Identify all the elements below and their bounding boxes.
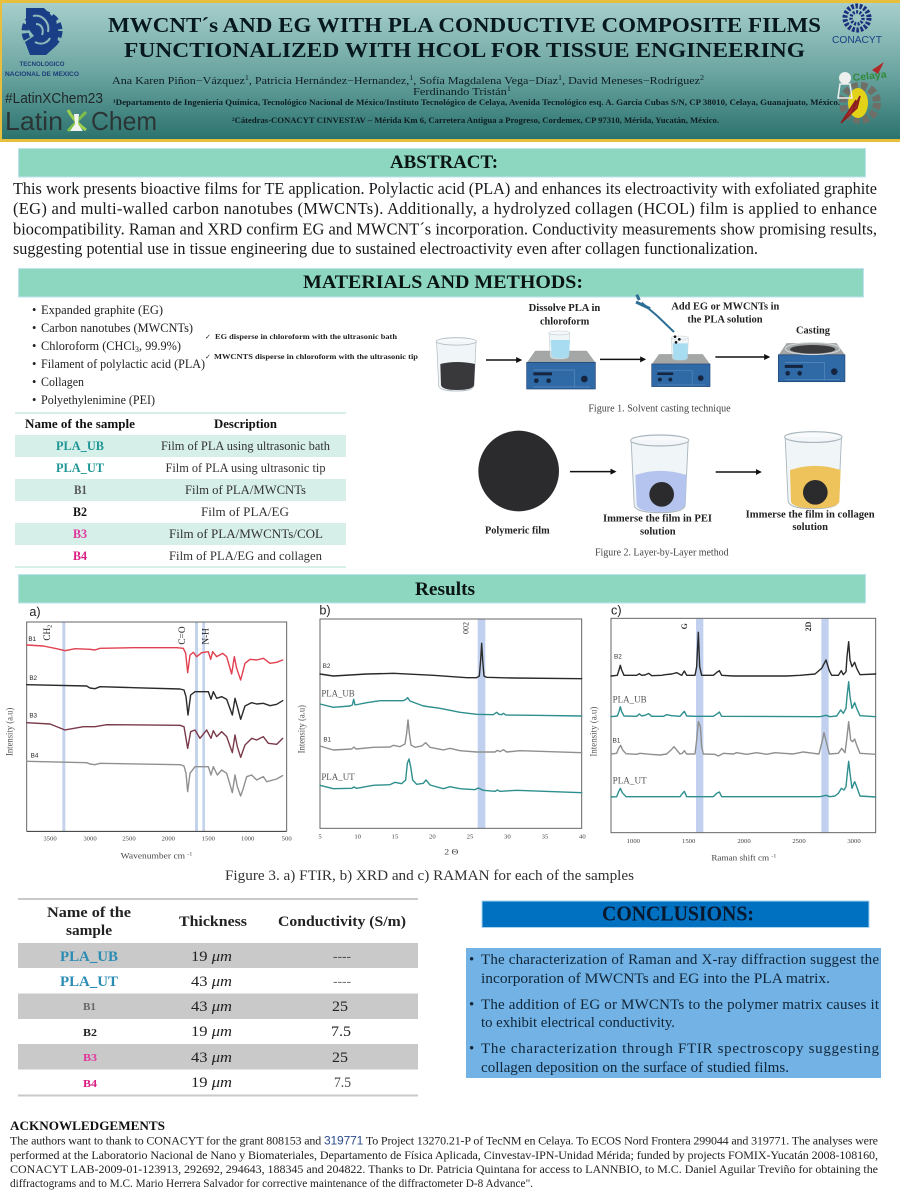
conclusions panel: • (469, 997, 474, 1013)
icon: film in collagen beaker (785, 432, 842, 509)
abstract text: biocompatibility. Raman and XRD confirm EG and MWCNT´s incorporation. Conductivity measurements show promising results, (13, 220, 877, 238)
chart c: Raman: 2500 (792, 838, 806, 845)
conclusions panel: incorporation of MWCNTs and EG into the PLA matrix. (481, 971, 830, 987)
conductivity table: 43 μm (191, 974, 232, 990)
arrow (715, 355, 769, 359)
icon: casting on hot plate (778, 343, 845, 382)
authors: , Sofía Magdalena Vega−Díaz (413, 76, 558, 87)
icon: pipette adding filler on hot plate (636, 295, 710, 387)
abstract text: (EG) and multi-walled carbon nanotubes (MWCNTs). Additionally, a hydrolyzed collagen (HCOL) film is applied to enhance (13, 199, 877, 218)
step labels: Casting (796, 325, 830, 336)
chart a: FTIR: B4 (31, 752, 39, 759)
step labels: chloroform (540, 316, 590, 327)
materials list: Expanded graphite (EG) (41, 303, 163, 317)
chart c: Raman: 1000 (627, 838, 641, 845)
chart b: XRD: 20 (429, 833, 436, 840)
chart b: XRD: Intensity (a.u) (588, 707, 598, 757)
acknowledgements: CONACYT LAB-2009-01-123913, 292692, 294643, 188345 and 204822. Thanks to Dr. Patricia Quintana for access to LANNBIO, to M.C. Daniel Aguilar Treviño for obtaining the (10, 1162, 878, 1176)
samples table (15, 412, 346, 568)
heading: abstract: ABSTRACT: (390, 152, 498, 173)
chart b: XRD: PLA_UB (321, 689, 355, 699)
chart b: XRD: 40 (579, 833, 586, 840)
logo: Tecnologico Nacional de Mexico (5, 8, 79, 78)
conductivity table: B3 (83, 1053, 97, 1064)
samples table: Film of PLA/MWCNTs (185, 483, 306, 497)
logo: CONACYT (832, 6, 882, 46)
abstract text: suggesting potential use in tissue engineering due to sustained electroactivity even after collagen functionalization. (13, 239, 758, 258)
step labels (485, 509, 875, 537)
affiliations: ¹Departamento de Ingeniería Química, Tecnológico Nacional de México/Instituto Tecnológico de Celaya, Avenida Tecnológico esq. A. García Cubas S/N, CP 38010, Celaya, Guanajuato, México. (113, 98, 840, 107)
samples table: B3 (73, 527, 87, 541)
caption: figure 2: Figure 2. Layer-by-Layer method (595, 548, 729, 559)
materials list: Filament of polylactic acid (PLA) (41, 357, 205, 371)
step labels: Immerse the film in PEI (603, 513, 712, 524)
materials list: • (32, 357, 36, 371)
heading: conclusions: CONCLUSIONS: (602, 902, 754, 926)
chart c: Raman: Raman shift cm (711, 854, 764, 863)
conductivity table: 43 μm (191, 999, 232, 1015)
heading: materials and methods (18, 268, 864, 297)
chart b: XRD: 30 (504, 833, 511, 840)
conductivity table: PLA_UB (60, 949, 118, 965)
dispersion notes: EG disperse in chloroform with the ultrasonic bath (215, 332, 398, 341)
step labels: Polymeric film (485, 525, 550, 536)
arrow (716, 470, 760, 474)
materials list: , 99.9%) (139, 339, 181, 353)
chart c: Raman: c) (611, 604, 622, 618)
icon: beaker with dispersion (436, 338, 476, 391)
chart a: FTIR: 500 (282, 836, 292, 843)
dispersion notes: ✓ (205, 333, 211, 341)
conductivity table (18, 898, 418, 1096)
heading: results: Results (415, 579, 475, 600)
samples table: PLA_UT (56, 461, 105, 475)
logo: Tecnologico Nacional de Mexico: NACIONAL DE MEXICO (5, 71, 79, 78)
step labels: solution (640, 526, 676, 537)
logo: Celaya: Celaya (852, 69, 888, 84)
acknowledgements: performed at the Laboratorio Nacional de Nano y Biomateriales, Departamento de Física Aplicada, Cinvestav-IPN-Unidad Mérida; funded by projects FOMIX-Yucatán 2008-108160, (10, 1148, 878, 1162)
chart b: XRD: 5 (318, 833, 322, 840)
figure 1 solvent casting diagram (436, 295, 845, 391)
chart c: Raman: B2 (614, 654, 622, 661)
samples table: Description (214, 417, 277, 431)
dispersion notes: ✓ (205, 353, 211, 361)
chart a: FTIR: Wavenumber cm (121, 851, 179, 861)
chart b: XRD: 35 (542, 833, 549, 840)
authors: 1 (409, 74, 414, 82)
samples table: PLA_UB (56, 439, 104, 453)
dispersion notes: MWCNTS disperse in chloroform with the ultrasonic tip (214, 352, 418, 361)
chart a: FTIR: 1000 (241, 836, 255, 843)
materials list: Chloroform (CHCl (41, 339, 136, 353)
conclusions panel: • (469, 1041, 474, 1057)
heading: abstract (18, 148, 866, 177)
arrow (600, 357, 645, 362)
arrow (486, 358, 521, 362)
abstract text (13, 179, 877, 258)
chart b: XRD (296, 604, 598, 856)
caption: figure 1: Figure 1. Solvent casting technique (588, 403, 731, 414)
step labels: the PLA solution (687, 314, 763, 325)
dispersion notes (205, 332, 418, 361)
conductivity table: 43 μm (191, 1050, 232, 1066)
samples table: Name of the sample (25, 417, 135, 431)
chart c: Raman: 2D (804, 621, 813, 631)
chart a: FTIR: 2000 (162, 836, 176, 843)
conductivity table: ---- (333, 974, 351, 990)
step labels: Add EG or MWCNTs in (671, 301, 780, 312)
poster title: FUNCTIONALIZED WITH HCOL FOR TISSUE ENGINEERING (124, 38, 805, 62)
materials list: • (32, 393, 36, 407)
heading: conclusions (482, 901, 869, 928)
logo: LatinXChem: Chem (91, 106, 157, 136)
conclusions panel (466, 948, 881, 1078)
conductivity table: Thickness (179, 914, 247, 930)
conclusions panel: The characterization through FTIR spectroscopy suggesting (481, 1041, 880, 1057)
chart a: FTIR: CH (43, 628, 53, 641)
conductivity table: 25 (332, 1050, 348, 1066)
chart c: Raman (611, 604, 876, 863)
figures: solvent casting and layer-by-layer (436, 295, 875, 559)
samples table: B2 (73, 505, 87, 519)
logo: Celaya (838, 62, 888, 123)
samples table: Film of PLA/MWCNTs/COL (169, 527, 323, 541)
conductivity table: Name of the (47, 905, 131, 921)
samples table: Film of PLA/EG (201, 505, 289, 519)
conductivity table: sample (66, 923, 112, 939)
chart a: FTIR: 2500 (122, 836, 136, 843)
conductivity table: B2 (83, 1028, 97, 1039)
chart b: XRD: 15 (392, 833, 399, 840)
chart b: XRD: 25 (467, 833, 474, 840)
samples table: B1 (74, 483, 87, 497)
chart a: FTIR: B1 (28, 636, 37, 643)
materials list: 3 (135, 345, 139, 354)
chart c: Raman: 2000 (737, 838, 751, 845)
arrow (570, 469, 615, 474)
icon: film in PEI beaker (631, 435, 689, 513)
conclusions panel: • (469, 952, 474, 968)
conductivity table: ---- (333, 949, 351, 965)
authors: , Patricia Hernández−Hernandez, (249, 76, 409, 87)
materials list: Carbon nanotubes (MWCNTs) (41, 321, 193, 335)
conclusions panel: The addition of EG or MWCNTs to the polymer matrix causes it (481, 997, 880, 1013)
chart c: Raman: PLA_UT (613, 775, 647, 785)
header band (0, 0, 900, 142)
authors: 2 (700, 74, 705, 82)
step labels: solution (792, 522, 828, 533)
authors: Ferdinando Tristán (413, 87, 493, 98)
materials list: Polyethylenimine (PEI) (41, 393, 155, 407)
heading: materials and methods: MATERIALS AND METHODS: (303, 272, 583, 293)
authors (112, 74, 705, 98)
chart c: Raman: -1 (771, 853, 777, 859)
abstract text: This work presents bioactive films for TE application. Polylactic acid (PLA) and enhances its electroactivity with exfoliated graphite (13, 179, 877, 198)
affiliations (113, 98, 840, 125)
chart b: XRD: 10 (354, 833, 362, 840)
chart a: FTIR: N-H (202, 628, 212, 645)
materials list: • (32, 339, 36, 353)
chart c: Raman: 3000 (847, 838, 861, 845)
chart a: FTIR (5, 605, 292, 861)
icon: polymeric film (478, 431, 559, 511)
materials list: • (32, 303, 36, 317)
conclusions panel: collagen deposition on the surface of studied films. (481, 1060, 789, 1076)
logo: CONACYT: CONACYT (832, 35, 882, 46)
conductivity table: 19 μm (191, 1075, 232, 1091)
chart a: FTIR: -1 (187, 851, 193, 857)
acknowledgements: ACKNOWLEDGEMENTS (10, 1119, 165, 1133)
chart a: FTIR: Intensity (a.u) (5, 708, 15, 756)
chart b: XRD: B1 (323, 736, 332, 743)
chart a: FTIR: a) (29, 605, 41, 619)
step labels (529, 301, 830, 336)
chart c: Raman: B1 (613, 737, 621, 744)
chart b: XRD: PLA_UT (321, 772, 355, 782)
acknowledgements (10, 1119, 878, 1190)
materials list: • (32, 321, 36, 335)
chart b: XRD: 002 (462, 622, 471, 634)
caption: figure 3: Figure 3. a) FTIR, b) XRD and c) RAMAN for each of the samples (225, 868, 634, 884)
heading: results (18, 574, 866, 603)
chart c: Raman: 1500 (682, 838, 696, 845)
materials list: Collagen (41, 375, 85, 389)
conclusions panel: to exhibit electrical conductivity. (481, 1015, 675, 1031)
affiliations: ²Cátedras-CONACYT CINVESTAV – Mérida Km 6, Carretera Antigua a Progreso, Cordemex, CP 97310, Mérida, Yucatán, México. (232, 116, 719, 125)
authors: 1 (245, 74, 249, 82)
conductivity table: 7.5 (334, 1075, 351, 1091)
conductivity table: B4 (83, 1079, 98, 1090)
chart a: FTIR: B2 (29, 675, 38, 682)
conductivity table: 7.5 (331, 1024, 351, 1040)
logo: LatinXChem: Latin (5, 106, 63, 136)
step labels: Dissolve PLA in (529, 303, 601, 314)
chart c: Raman: PLA_UB (613, 695, 647, 705)
poster title: MWCNT´s AND EG WITH PLA CONDUCTIVE COMPOSITE FILMS (108, 13, 821, 37)
conductivity table: 19 μm (191, 949, 232, 965)
conductivity table: 19 μm (191, 1024, 232, 1040)
materials list (32, 303, 205, 407)
logo: LatinXChem (5, 106, 157, 136)
chart a: FTIR: 2 (48, 625, 54, 628)
acknowledgements: The authors want to thank to CONACYT for the grant 808153 and 319771 To Project 13270.21-P of TecNM en Celaya. To ECOS Nord Frontera 299044 and 319771. The analyses were (10, 1134, 878, 1148)
chart b: XRD: Intensity (a.u) (296, 705, 306, 753)
icon: hot plate with beaker (527, 331, 595, 389)
authors: Ana Karen Piñon−Vázquez (112, 76, 228, 87)
chart b: XRD: b) (319, 604, 331, 618)
materials list: • (32, 375, 36, 389)
chart a: FTIR: B3 (29, 713, 38, 720)
samples table: B4 (73, 549, 88, 563)
acknowledgements: diffractograms and to M.C. Mario Herrera Salvador for corrective maintenance of the diffractometer D-8 Advance". (10, 1176, 533, 1190)
chart a: FTIR: 3500 (43, 836, 57, 843)
conclusions panel: The characterization of Raman and X-ray diffraction suggest the (481, 952, 879, 968)
authors: 1 (558, 74, 563, 82)
poster title (108, 13, 821, 62)
conductivity table: PLA_UT (60, 974, 118, 990)
step labels: Immerse the film in collagen (746, 509, 875, 520)
authors: , David Meneses−Rodríguez (562, 76, 700, 87)
samples table: Film of PLA/EG and collagen (169, 549, 323, 563)
hashtag: #LatinXChem23 (5, 90, 103, 107)
conductivity table: 25 (332, 999, 348, 1015)
chart a: FTIR: C=O (178, 626, 188, 645)
authors: 1 (507, 85, 512, 93)
chart a: FTIR: 3000 (83, 836, 97, 843)
conductivity table: B1 (83, 1002, 96, 1013)
samples table: Film of PLA using ultrasonic tip (166, 461, 326, 475)
conductivity table: Conductivity (S/m) (278, 914, 406, 930)
logo: Tecnologico Nacional de Mexico: TECNOLOGICO (20, 61, 64, 68)
figure 2 layer-by-layer diagram (478, 431, 875, 537)
chart b: XRD: B2 (323, 663, 331, 670)
chart b: XRD: 2 Θ (444, 847, 458, 856)
chart a: FTIR: 1500 (202, 836, 216, 843)
samples table: Film of PLA using ultrasonic bath (161, 439, 331, 453)
chart c: Raman: G (680, 623, 689, 629)
